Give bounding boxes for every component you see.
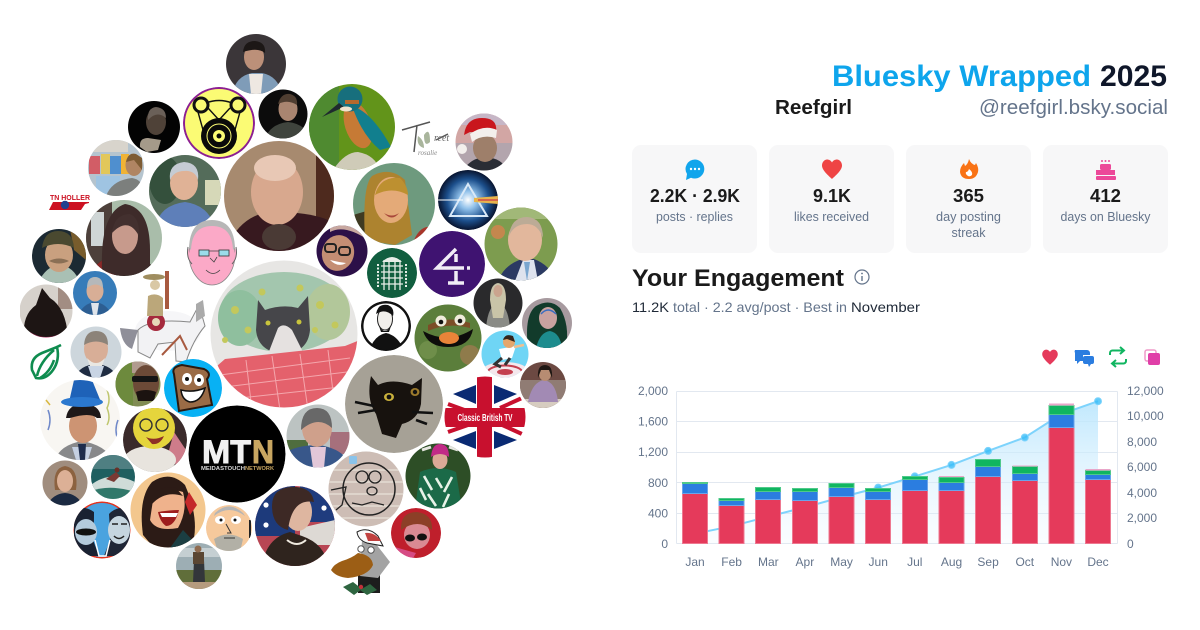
right axis labels: 0 bbox=[1127, 537, 1134, 551]
avatar: laughing pin-up woman bbox=[130, 472, 206, 548]
month labels: Oct bbox=[1015, 555, 1035, 569]
avatar: cartoon man jumping onto target bbox=[482, 330, 528, 378]
avatar: man in beanie with moustache bbox=[32, 229, 86, 283]
icon: info bbox=[855, 270, 869, 284]
avatar: small black cat with person bbox=[20, 284, 73, 340]
month labels: Nov bbox=[1051, 555, 1072, 569]
avatar: MeidasTouch Network logo: MT bbox=[202, 434, 251, 470]
cumulative area bbox=[695, 401, 1098, 544]
avatar: woman with long dark hair bbox=[86, 200, 162, 276]
panel: day posting streak stat bbox=[906, 145, 1031, 253]
right axis labels: 8,000 bbox=[1127, 435, 1157, 449]
avatar: prism on dark blue bbox=[438, 170, 498, 230]
heading: Your Engagement: Your Engagement bbox=[632, 265, 844, 292]
icon: quote squares bbox=[1145, 350, 1160, 365]
panel: avatar bubble cluster bbox=[20, 34, 572, 595]
avatar: pencil doodle face on lined wall bbox=[328, 451, 404, 527]
logo: TN Holler bbox=[49, 193, 91, 210]
icon: repost arrows bbox=[1110, 347, 1126, 367]
month labels: Dec bbox=[1087, 555, 1109, 569]
engagement summary: 11.2K bbox=[632, 299, 670, 315]
left axis labels: 1,200 bbox=[638, 445, 668, 459]
avatar: figure with long silver hair bbox=[473, 278, 523, 328]
panel: day posting streak stat: streak bbox=[952, 226, 986, 240]
cumulative line bbox=[695, 401, 1098, 534]
avatar: woman with blonde-brown hair bbox=[42, 460, 88, 506]
stacked bars bbox=[682, 404, 1110, 544]
logo: handwritten Tweets with leaves bbox=[402, 122, 449, 157]
right axis labels bbox=[1127, 384, 1164, 551]
avatar: black cat on grey felt bbox=[345, 355, 443, 453]
icon: flame bbox=[960, 159, 978, 179]
logo: handwritten Tweets with leaves: rosalie bbox=[418, 149, 437, 157]
month labels: Apr bbox=[796, 555, 814, 569]
month labels: Jul bbox=[907, 555, 922, 569]
avatar: smiling man with white hair bbox=[149, 155, 221, 227]
panel: likes received stat: 9.1K bbox=[813, 186, 851, 206]
avatar: woman at table bbox=[520, 362, 566, 408]
icon: green onion logo bbox=[32, 345, 61, 378]
panel: day posting streak stat: 365 bbox=[953, 186, 984, 206]
month labels: May bbox=[830, 555, 853, 569]
avatar: man with glasses on purple bbox=[316, 225, 368, 277]
avatar: pink-haired woman in leaf jumpsuit bbox=[405, 443, 471, 509]
avatar: yellow M&M plush with glasses bbox=[123, 407, 187, 474]
logo: handwritten Tweets with leaves: reet bbox=[434, 133, 449, 144]
panel: days on Bluesky stat bbox=[1043, 145, 1168, 253]
left axis labels: 800 bbox=[648, 476, 668, 490]
avatar: MeidasTouch Network logo bbox=[188, 406, 286, 502]
icon: knight on horseback illustration bbox=[120, 271, 205, 362]
avatar: two faces in sunglasses bbox=[74, 502, 130, 558]
avatar: pale cartoon grumpy man bbox=[206, 505, 252, 552]
avatar: MeidasTouch Network logo: N bbox=[252, 434, 274, 470]
avatar: smiling politician against foliage bbox=[484, 207, 558, 281]
avatar: man in blue suit with pink shirt bbox=[286, 404, 350, 468]
panel: posts and replies stat: 2.2K · 2.9K bbox=[650, 186, 740, 206]
avatar: painted cat with red table bbox=[210, 260, 360, 410]
month labels: Feb bbox=[721, 555, 742, 569]
icon: heart bbox=[822, 160, 842, 179]
chart legend icons bbox=[1042, 347, 1160, 367]
avatar: portcullis on green bbox=[367, 248, 417, 298]
avatar: MeidasTouch Network logo: NETWORK bbox=[245, 466, 274, 472]
panel: days on Bluesky stat: 412 bbox=[1090, 186, 1121, 206]
avatar: bald man with microphone bbox=[224, 141, 336, 251]
right axis labels: 12,000 bbox=[1127, 384, 1164, 398]
month labels: Jun bbox=[869, 555, 888, 569]
month labels: Aug bbox=[941, 555, 962, 569]
avatar: green furry puppet bbox=[414, 304, 482, 372]
icon: likes heart bbox=[1042, 350, 1058, 365]
avatar: cartoon toast on blue bbox=[164, 359, 222, 417]
engagement summary: November bbox=[851, 299, 920, 315]
avatar: painted blonde woman bbox=[353, 163, 435, 245]
month labels: Mar bbox=[758, 555, 779, 569]
right axis labels: 6,000 bbox=[1127, 460, 1157, 474]
avatar: monochrome man in shadow bbox=[128, 101, 180, 153]
chart: engagement by month stacked bars with cumulative line bbox=[638, 384, 1164, 569]
avatar: figure standing in a field bbox=[176, 543, 222, 590]
panel: posts and replies stat: posts · replies bbox=[656, 210, 733, 224]
avatar: Slag poster and man bbox=[88, 140, 146, 196]
right axis labels: 2,000 bbox=[1127, 511, 1157, 525]
avatar: woman before US flag bbox=[255, 486, 335, 566]
icon: chat bubble bbox=[686, 160, 704, 180]
month labels: Jan bbox=[685, 555, 705, 569]
avatar: Classic British TV Union flag bbox=[444, 376, 526, 458]
avatar: man in dark shirt bbox=[258, 89, 310, 139]
avatar: man in blue party hat bbox=[40, 380, 120, 460]
avatar: engraved Lincoln bbox=[361, 301, 411, 351]
left axis labels: 0 bbox=[661, 537, 668, 551]
engagement summary: total · 2.2 avg/post · Best in bbox=[673, 299, 847, 315]
avatar: surfer on wave bbox=[91, 455, 135, 499]
panel: posts and replies stat bbox=[632, 145, 757, 253]
avatar: man in santa hat bbox=[455, 113, 513, 173]
month labels: Sep bbox=[977, 555, 999, 569]
avatar: grey-haired man on blue bbox=[73, 271, 117, 315]
panel: days on Bluesky stat: days on Bluesky bbox=[1060, 210, 1151, 224]
panel: likes received stat: likes received bbox=[794, 210, 869, 224]
handle: @reefgirl.bsky.social bbox=[979, 97, 1168, 119]
heading: Bluesky Wrapped 2025: Bluesky Wrapped bbox=[832, 60, 1091, 93]
avatar: person in sunglasses with red background bbox=[391, 508, 441, 560]
avatar: cartoon duck with santa hat and holly bbox=[331, 530, 390, 595]
avatar: man in blue blazer bbox=[226, 34, 286, 94]
avatar: yellow bear with vinyl record bbox=[183, 87, 255, 159]
avatar: pink cartoon man with glasses bbox=[188, 220, 236, 285]
right axis labels: 10,000 bbox=[1127, 409, 1164, 423]
icon: replies bubbles bbox=[1075, 350, 1094, 367]
avatar: Classic British TV Union flag: Classic British TV bbox=[458, 413, 513, 424]
month labels bbox=[685, 555, 1109, 569]
avatar: man in sunglasses bbox=[115, 361, 162, 407]
left axis labels bbox=[638, 384, 668, 551]
logo: TN Holler: TN HOLLER bbox=[50, 193, 91, 202]
panel: day posting streak stat: day posting bbox=[936, 210, 1001, 224]
avatar: woman with teal outfit bbox=[522, 298, 572, 348]
avatar: man with grey hair and white beard bbox=[70, 326, 122, 378]
panel: likes received stat bbox=[769, 145, 894, 253]
avatar: MeidasTouch Network logo: MEIDASTOUCH bbox=[201, 466, 245, 472]
cumulative points bbox=[875, 398, 1102, 491]
heading: Bluesky Wrapped 2025: 2025 bbox=[1100, 60, 1167, 93]
left axis labels: 2,000 bbox=[638, 384, 668, 398]
avatar: Channel 4 logo bbox=[419, 231, 485, 297]
icon: birthday cake bbox=[1096, 160, 1116, 180]
engagement summary bbox=[632, 299, 920, 315]
avatar: kingfisher bbox=[309, 84, 395, 170]
display name: Reefgirl bbox=[775, 97, 852, 119]
left axis labels: 400 bbox=[648, 506, 668, 520]
left axis labels: 1,600 bbox=[638, 414, 668, 428]
right axis labels: 4,000 bbox=[1127, 486, 1157, 500]
